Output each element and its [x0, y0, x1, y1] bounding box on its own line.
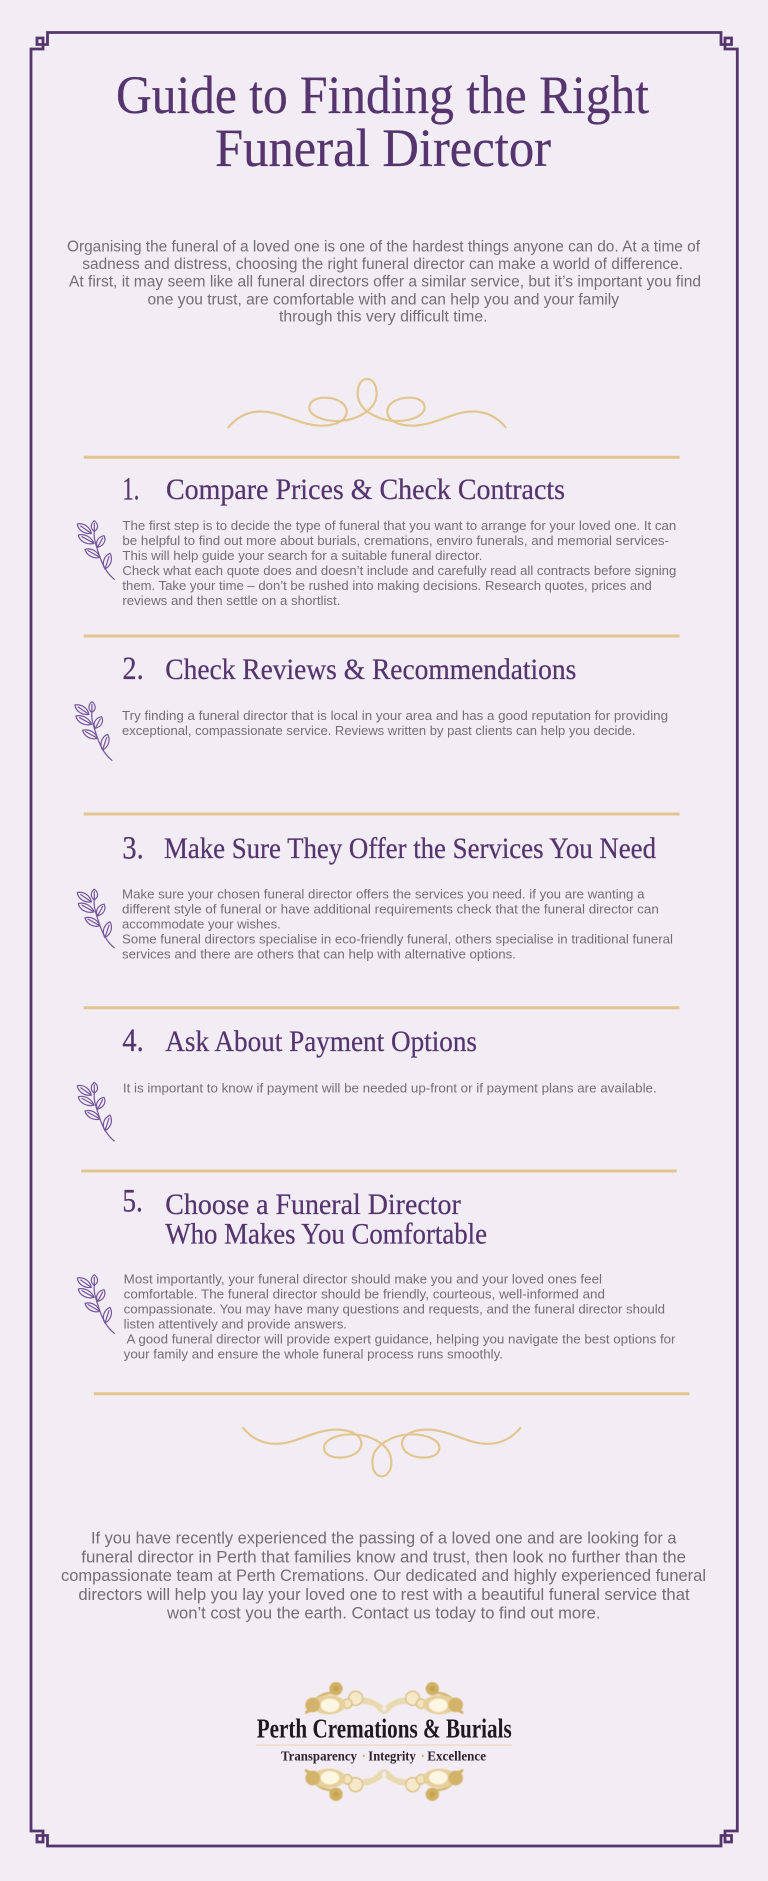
- closing paragraph: funeral director in Perth that families know and trust, then look no further than the: [81, 1548, 686, 1566]
- step 1 body text: reviews and then settle on a shortlist.: [122, 593, 340, 608]
- logo tagline: Excellence: [427, 1749, 486, 1764]
- logo tagline: [281, 1749, 486, 1764]
- step 3 body text: services and there are others that can help with alternative options.: [122, 946, 516, 961]
- logo rule: [256, 1744, 512, 1746]
- panel: step 1: [77, 471, 676, 608]
- intro paragraph: At first, it may seem like all funeral directors offer a similar service, but it’s important you find: [69, 274, 701, 291]
- panel: step 2: [75, 651, 668, 760]
- intro paragraph: sadness and distress, choosing the right funeral director can make a world of difference.: [82, 256, 683, 273]
- step 5 body text: [124, 1271, 676, 1361]
- step 3 body text: different style of funeral or have additional requirements check that the funeral director can: [122, 901, 659, 916]
- step 3 number: 3.: [122, 830, 144, 866]
- closing paragraph: If you have recently experienced the passing of a loved one and are looking for a: [91, 1529, 677, 1547]
- divider line 1: [84, 456, 680, 459]
- closing paragraph: directors will help you lay your loved one to rest with a beautiful funeral service that: [78, 1586, 690, 1604]
- logo tagline: Integrity: [368, 1749, 416, 1764]
- logo ornament top: [305, 1682, 463, 1714]
- step 1 body text: be helpful to find out more about burials, cremations, enviro funerals, and memorial services-: [122, 533, 669, 548]
- step 5 body text: compassionate. You may have many questions and requests, and the funeral director should: [124, 1301, 665, 1316]
- closing paragraph: won’t cost you the earth. Contact us today to find out more.: [166, 1605, 600, 1623]
- icon: leaf sprig 3: [77, 889, 114, 948]
- step 1 body text: them. Take your time – don’t be rushed into making decisions. Research quotes, prices and: [122, 578, 652, 593]
- step 5 heading: Choose a Funeral Director: [165, 1188, 461, 1221]
- step 3 body text: Some funeral directors specialise in eco-friendly funeral, others specialise in traditional funeral: [122, 931, 673, 946]
- icon: leaf sprig 1: [77, 521, 114, 579]
- step 5 number: 5.: [122, 1184, 143, 1220]
- step 5 body text: your family and ensure the whole funeral process runs smoothly.: [124, 1346, 503, 1361]
- logo tagline: ·: [420, 1749, 425, 1764]
- title: [116, 65, 649, 178]
- step 1 heading: Compare Prices & Check Contracts: [166, 473, 565, 506]
- step 5 body text: A good funeral director will provide expert guidance, helping you navigate the best options for: [126, 1331, 676, 1346]
- logo ornament bottom: [305, 1769, 463, 1801]
- logo tagline: ·: [362, 1749, 366, 1764]
- step 2 heading: Check Reviews & Recommendations: [165, 653, 576, 686]
- icon: leaf sprig 4: [77, 1082, 114, 1141]
- panel: step 3: [77, 830, 673, 961]
- step 4 body text: It is important to know if payment will be needed up-front or if payment plans are available.: [123, 1080, 657, 1095]
- step 5 heading: [165, 1188, 487, 1250]
- divider line 4: [84, 1006, 680, 1009]
- step 1 body text: This will help guide your search for a suitable funeral director.: [122, 548, 482, 563]
- logo name: Perth Cremations & Burials: [257, 1714, 512, 1744]
- title: Guide to Finding the Right: [116, 65, 649, 125]
- divider line 6: [94, 1392, 689, 1395]
- intro paragraph: Organising the funeral of a loved one is one of the hardest things anyone can do. At a time of: [67, 239, 701, 256]
- step 1 body text: The first step is to decide the type of funeral that you want to arrange for your loved one. It can: [122, 518, 676, 533]
- step 3 body text: accommodate your wishes.: [122, 916, 281, 931]
- step 1 number: 1.: [122, 471, 139, 507]
- logo tagline: Transparency: [281, 1749, 357, 1764]
- bottom flourish: [243, 1428, 520, 1476]
- intro paragraph: one you trust, are comfortable with and can help you and your family: [148, 291, 619, 308]
- closing paragraph: compassionate team at Perth Cremations. Our dedicated and highly experienced funeral: [61, 1567, 706, 1585]
- step 2 body text: [122, 708, 668, 738]
- step 1 body text: Check what each quote does and doesn’t include and carefully read all contracts before signing: [122, 563, 676, 578]
- step 5 heading: Who Makes You Comfortable: [165, 1217, 487, 1250]
- step 1 body text: [122, 518, 676, 608]
- divider line 5: [81, 1170, 677, 1172]
- step 2 number: 2.: [122, 651, 144, 687]
- step 3 body text: [122, 886, 673, 961]
- step 4 heading: Ask About Payment Options: [165, 1025, 477, 1058]
- intro paragraph: through this very difficult time.: [279, 309, 488, 326]
- step 4 number: 4.: [122, 1023, 144, 1059]
- panel: step 4: [77, 1023, 657, 1141]
- divider line 2: [84, 634, 680, 638]
- step 5 body text: Most importantly, your funeral director should make you and your loved ones feel: [124, 1271, 602, 1286]
- intro paragraph: [67, 239, 701, 326]
- step 3 heading: Make Sure They Offer the Services You Need: [164, 832, 656, 865]
- step 2 body text: exceptional, compassionate service. Reviews written by past clients can help you decide.: [122, 723, 636, 738]
- divider line 3: [84, 812, 680, 816]
- icon: leaf sprig 2: [75, 702, 112, 760]
- title: Funeral Director: [215, 118, 551, 178]
- icon: leaf sprig 5: [77, 1275, 114, 1333]
- top flourish: [228, 379, 506, 427]
- step 3 body text: Make sure your chosen funeral director offers the services you need. if you are wanting a: [122, 886, 645, 901]
- step 2 body text: Try finding a funeral director that is local in your area and has a good reputation for providing: [122, 708, 668, 723]
- logo: Perth Cremations & Burials: [256, 1682, 512, 1801]
- closing paragraph: [61, 1529, 706, 1623]
- step 5 body text: comfortable. The funeral director should be friendly, courteous, well-informed and: [124, 1286, 605, 1301]
- panel: step 5: [77, 1184, 676, 1361]
- step 5 body text: listen attentively and provide answers.: [124, 1316, 347, 1331]
